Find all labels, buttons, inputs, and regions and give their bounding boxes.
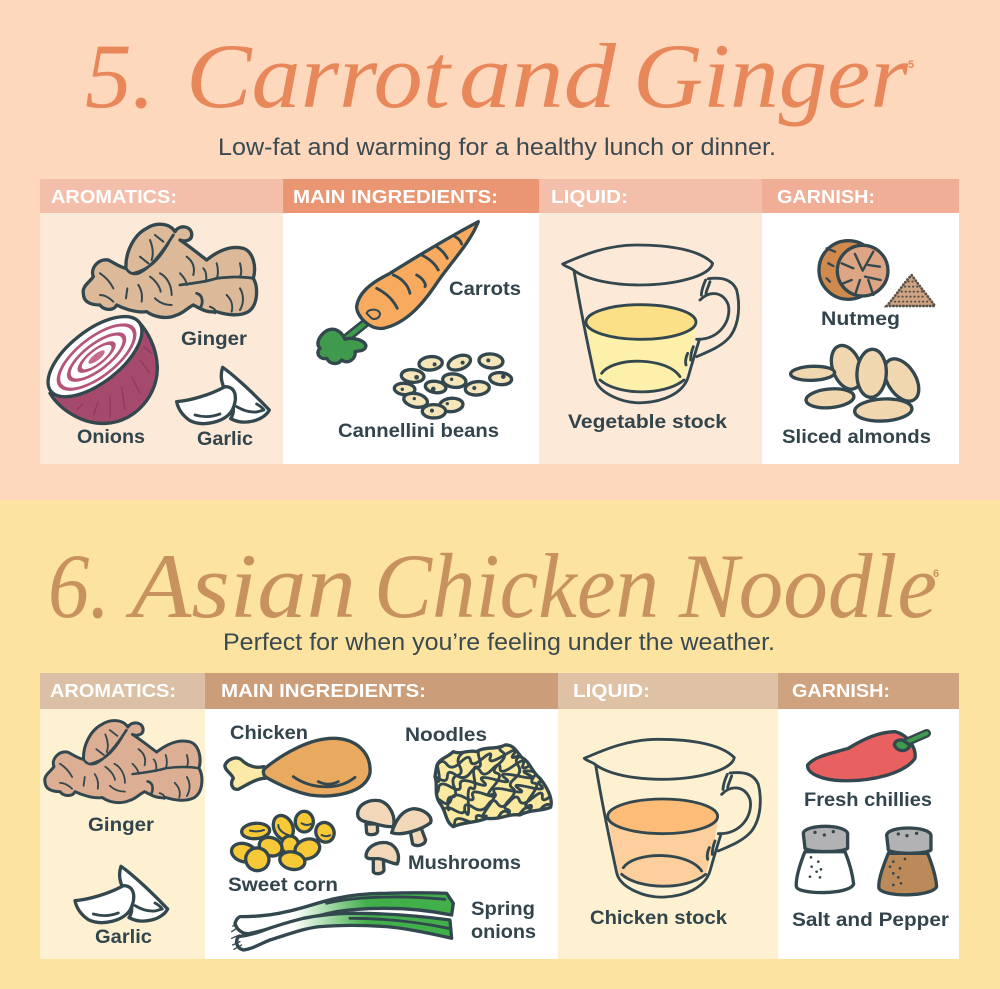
title: 5. Carrot and Ginger: 5. (85, 25, 155, 127)
title: 6. Asian Chicken Noodle: Noodle (678, 535, 937, 637)
heading: aromatics: AROMATICS: (50, 681, 176, 701)
label: spring onions: Spring (471, 899, 535, 920)
footnote 5: 5 (908, 59, 914, 71)
label: garlic: Garlic (95, 927, 152, 948)
heading: aromatics: AROMATICS: (51, 187, 177, 207)
column: liquid (539, 179, 762, 464)
title: 5. Carrot and Ginger: Ginger (633, 25, 909, 127)
label: fresh chillies: Fresh chillies (804, 790, 932, 811)
label: carrots: Carrots (449, 279, 521, 300)
column: main ingredients (205, 673, 561, 959)
icon: mushrooms (358, 800, 431, 874)
heading: main ingredients: MAIN INGREDIENTS: (221, 681, 426, 701)
label: noodles: Noodles (405, 725, 487, 746)
label: garlic: Garlic (197, 429, 253, 450)
heading: garnish: GARNISH: (792, 681, 890, 701)
icon: noodles (433, 743, 553, 828)
label: sliced almonds: Sliced almonds (782, 427, 931, 448)
column: main ingredients (283, 179, 539, 464)
icon: onion (35, 302, 157, 423)
icon: measuring jug with vegetable stock (563, 245, 739, 403)
icon: garlic (177, 367, 269, 424)
label: ginger: Ginger (181, 329, 248, 350)
icon: salt shaker (796, 826, 854, 893)
label: ginger: Ginger (88, 815, 155, 836)
label: chicken: Chicken (230, 723, 308, 744)
title: 6. Asian Chicken Noodle (48, 535, 937, 637)
icon: pepper shaker (879, 828, 937, 895)
icon: nutmeg (819, 241, 935, 306)
column: garnish (778, 673, 959, 959)
label: sweet corn: Sweet corn (228, 875, 338, 896)
title: 5. Carrot and Ginger: Carrot (186, 25, 453, 127)
title: 5. Carrot and Ginger: and (459, 25, 617, 127)
icon: carrot (318, 222, 478, 364)
footnote 6: 6 (933, 568, 939, 580)
label: nutmeg: Nutmeg (821, 309, 900, 330)
panel: carrot and ginger section (0, 0, 1000, 500)
label: spring onions second line: onions (471, 922, 536, 943)
title: 5. Carrot and Ginger (85, 25, 909, 127)
icon: sweet corn (229, 811, 337, 874)
label: mushrooms: Mushrooms (408, 853, 521, 874)
column: aromatics (40, 673, 205, 959)
icon: sliced almonds (790, 341, 926, 422)
label: vegetable stock: Vegetable stock (568, 412, 727, 433)
title: 6. Asian Chicken Noodle: Chicken (374, 535, 659, 637)
column: garnish (762, 179, 959, 464)
icon: red chilli (808, 732, 927, 781)
icon: spring onions (232, 893, 453, 950)
icon: ginger (83, 224, 257, 317)
icon: measuring jug with chicken stock (584, 739, 760, 897)
label: onions: Onions (77, 427, 145, 448)
column: aromatics (35, 179, 283, 464)
panel: asian chicken noodle section (0, 500, 1000, 989)
label: salt and pepper: Salt and Pepper (792, 910, 950, 931)
subtitle: Perfect for when you’re feeling under the weather. (223, 629, 775, 656)
subtitle: Low-fat and warming for a healthy lunch or dinner. (218, 134, 776, 161)
heading: liquid: LIQUID: (573, 681, 650, 701)
icon: ginger (45, 721, 202, 803)
label: cannellini beans: Cannellini beans (338, 421, 499, 442)
column: liquid (558, 673, 778, 959)
label: chicken stock: Chicken stock (590, 908, 727, 929)
icon: chicken drumstick (225, 738, 370, 796)
heading: liquid: LIQUID: (551, 187, 628, 207)
heading: garnish: GARNISH: (777, 187, 875, 207)
title: 6. Asian Chicken Noodle: Asian (125, 535, 356, 637)
heading: main ingredients: MAIN INGREDIENTS: (293, 187, 498, 207)
icon: cannellini beans (394, 352, 512, 418)
icon: garlic (75, 866, 168, 923)
title: 6. Asian Chicken Noodle: 6. (48, 535, 110, 637)
